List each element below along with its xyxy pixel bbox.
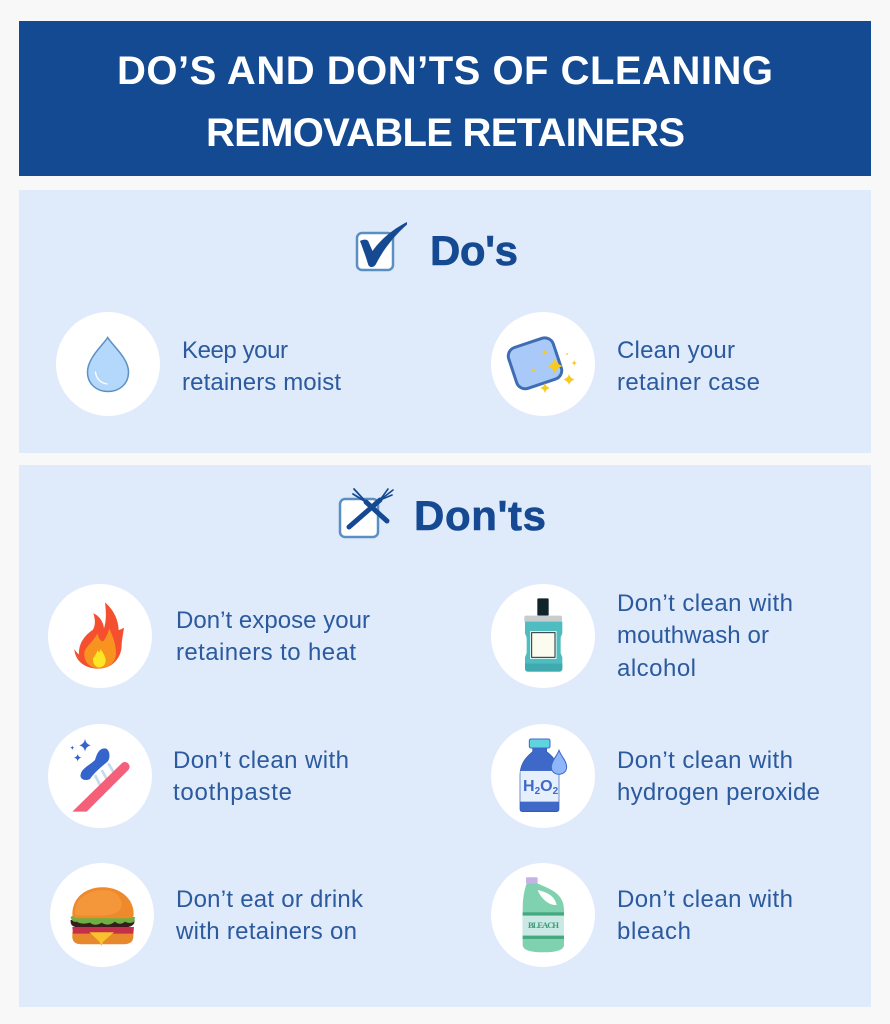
- panel: do's: [19, 190, 871, 453]
- label: H2O2: 2: [553, 786, 559, 797]
- text: clean case: Clean your: [617, 337, 735, 364]
- text: clean case: [617, 337, 760, 396]
- text: keep moist: Keep your: [182, 337, 288, 364]
- item: toothpaste: [48, 724, 349, 828]
- text: toothpaste: Don’t clean with: [173, 747, 349, 774]
- heading: don'ts: Don'ts: [414, 492, 546, 539]
- label: BLEACH: BLEACH: [528, 920, 559, 930]
- text: keep moist: retainers moist: [182, 369, 341, 396]
- text: mouthwash: mouthwash or: [617, 622, 769, 649]
- item: bleach: [491, 863, 793, 967]
- title: DO’S AND DON’TS OF CLEANING: [117, 49, 773, 93]
- text: eat or drink: Don’t eat or drink: [176, 886, 364, 913]
- icon: checkbox: [357, 222, 407, 270]
- text: clean case: retainer case: [617, 369, 760, 396]
- title: REMOVABLE RETAINERS: [206, 111, 685, 155]
- icon: mouthwash bottle: [491, 584, 595, 688]
- item: keep moist: [56, 312, 341, 416]
- item: heat: [48, 584, 370, 688]
- text: bleach: bleach: [617, 918, 691, 945]
- text: bleach: Don’t clean with: [617, 886, 793, 913]
- icon: flame: [48, 584, 152, 688]
- icon: toothbrush: [48, 724, 152, 828]
- panel: don'ts: [19, 465, 871, 1007]
- text: heat: retainers to heat: [176, 639, 356, 666]
- icon: burger: [50, 863, 154, 967]
- text: heat: Don’t expose your: [176, 607, 370, 634]
- title: [117, 49, 773, 155]
- icon: retainer case: [491, 312, 595, 416]
- icon: water drop: [56, 312, 160, 416]
- text: heat: [176, 607, 370, 666]
- header banner: [19, 21, 871, 176]
- heading: do's: Do's: [430, 227, 518, 274]
- text: bleach: [617, 886, 793, 945]
- text: hydrogen peroxide: [617, 747, 820, 806]
- text: hydrogen peroxide: hydrogen peroxide: [617, 779, 820, 806]
- item: mouthwash: [491, 584, 793, 688]
- text: keep moist: [182, 337, 341, 396]
- icon: crossed box: [340, 489, 393, 537]
- text: mouthwash: [617, 590, 793, 682]
- text: mouthwash: alcohol: [617, 655, 696, 682]
- text: toothpaste: [173, 747, 349, 806]
- icon: peroxide bottle: [491, 724, 595, 828]
- item: hydrogen peroxide: [491, 724, 820, 828]
- text: toothpaste: toothpaste: [173, 779, 292, 806]
- label: H2O2: 2: [535, 786, 541, 797]
- label: H2O2: O: [540, 778, 553, 795]
- text: eat or drink: with retainers on: [175, 918, 357, 945]
- text: mouthwash: Don’t clean with: [617, 590, 793, 617]
- text: eat or drink: [175, 886, 364, 945]
- label: H2O2: H: [523, 778, 535, 795]
- item: eat or drink: [50, 863, 364, 967]
- item: clean case: [491, 312, 760, 416]
- text: hydrogen peroxide: Don’t clean with: [617, 747, 793, 774]
- icon: bleach bottle: [491, 863, 595, 967]
